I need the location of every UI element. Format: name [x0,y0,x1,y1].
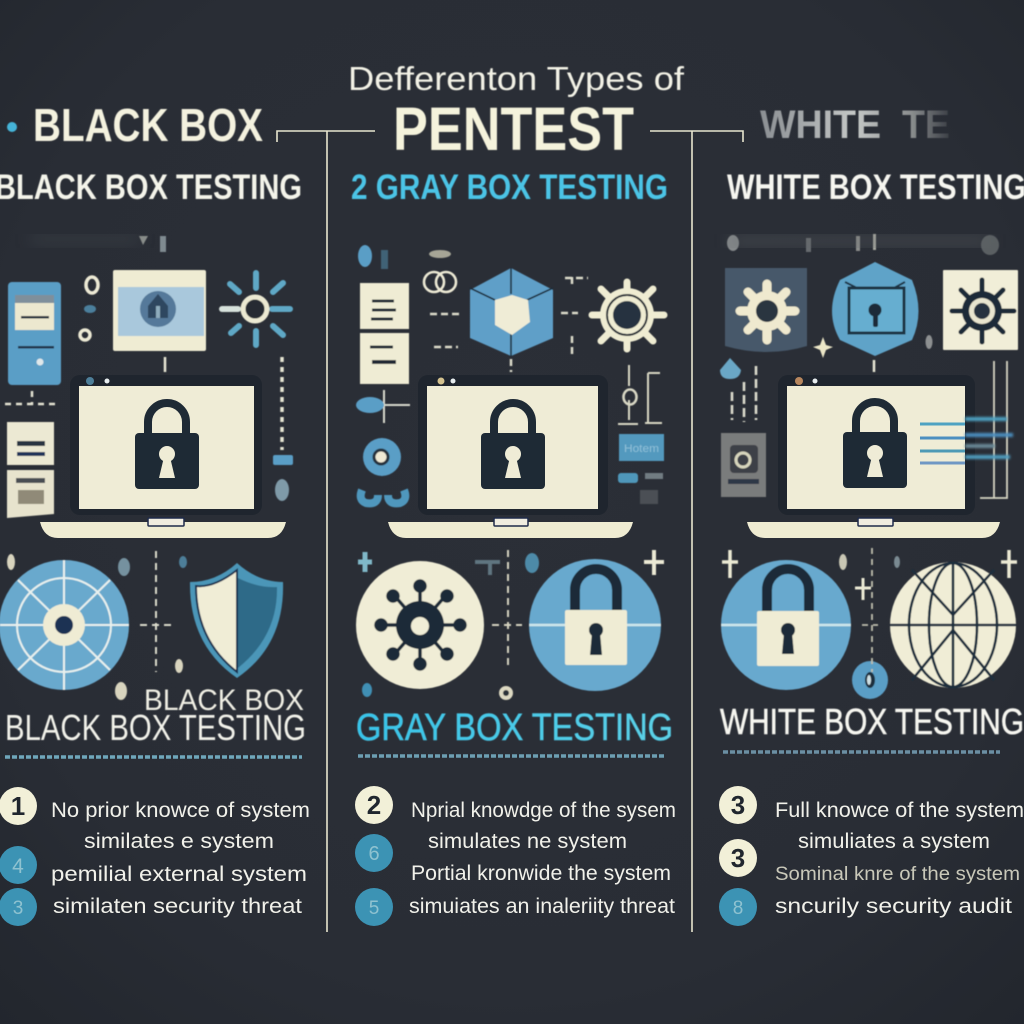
badge 3 [0,888,37,926]
icon: side frame [980,361,1007,498]
icon: blue label: Hotem [624,443,659,455]
title: Defferenton Types of: Defferenton Types of [348,60,685,97]
icon: drop mark [926,335,932,349]
icon: blue lock shield [832,262,918,356]
faded top marks [139,234,999,255]
icon: sun gear [222,273,290,345]
icon: padlock [843,402,907,488]
badge 3 second [719,839,757,877]
list text: No prior knowce of system [51,799,310,822]
icon: sparkle [813,337,833,358]
icon: hexagon [470,268,553,356]
dashed separators [5,752,1000,757]
laptop base [40,522,286,538]
panel: black box icons [5,270,293,518]
list text: sncurily security audit [775,895,1012,918]
bullet dot [7,122,17,132]
laptop base [388,522,633,538]
icon: laptop white box [747,375,1013,538]
icon: laptop gray box [388,375,633,538]
heading: Black Box Testing: BLACK BOX TESTING [0,168,302,207]
dotted line and tab [273,357,293,501]
icon: shield [190,563,283,678]
dashed connector left [5,391,60,405]
heading: Gray Box Testing: 2 GRAY BOX TESTING [351,168,668,207]
icon: linked rings [424,272,456,292]
icon: gear in slate shield [725,268,807,352]
icon: cream gear [592,282,664,349]
icon: lock circle [721,560,851,690]
icon: blue disc and rings [361,438,405,503]
icon: top drops [358,245,451,269]
icon: padlock [481,403,545,489]
badge 3: 3 [13,898,23,919]
icon: virus circle [356,561,484,689]
icon: gray camera card [721,433,766,497]
column headings [0,168,1024,207]
badge 8: 8 [733,898,743,919]
dashed lines [732,366,756,422]
center connector [873,360,875,372]
icon: water drop [720,358,741,379]
blurred placeholder strips [30,236,990,246]
list text: Portial kronwide the system [411,862,671,885]
badge 2 [355,786,393,824]
panel: gray box icons [356,245,664,504]
badge 3 second: 3 [731,843,745,873]
dashed connector [164,357,166,372]
icon: padlock [135,403,199,489]
dashed center cross [140,551,174,672]
list text: simulates ne system [428,830,627,853]
data stripes outside screen [965,419,1013,457]
list text: Nprial knowdge of the sysem [411,799,676,822]
icon: small rings [80,277,98,340]
heading: faded White Te: WHITE TE [760,103,950,147]
list text: simuliates a system [798,830,990,853]
heading: Black Box: BLACK BOX [33,99,263,151]
list text: similates e system [84,830,274,853]
laptop base [747,522,1000,538]
icon: dark gear on cream [943,270,1018,350]
dashed center line [492,550,522,670]
sparkles and dashes [722,548,1017,672]
lower icons gray box [356,550,664,700]
icon: blue drop [852,661,888,699]
badge 2 [0,846,37,884]
icon: blue blob [356,397,384,413]
icon: lock circle [529,559,661,691]
label: Black Box Testing: BLACK BOX TESTING [5,707,306,748]
list text: similaten security threat [53,895,302,918]
icon: globe [890,562,1016,688]
badge 2: 2 [367,790,381,820]
list: black box points [0,787,310,926]
icon: window with shield [113,270,206,351]
icon: target circle [0,560,129,690]
list text [775,799,1024,918]
list: gray box points [355,786,676,926]
list text: simuiates an inaleriity threat [409,895,675,918]
label: Black Box: BLACK BOX [144,684,304,717]
list: white box points [719,786,1024,926]
badge 1: 1 [11,791,25,821]
list text: Full knowce of the system [775,799,1024,822]
connector marks [430,277,588,372]
list text [51,799,310,918]
small decorative marks [7,554,187,700]
badge 6 [355,834,393,872]
badge 5 [355,888,393,926]
list text: pemilial external system [51,863,307,886]
lower icons black box [0,551,283,700]
bottom titles [5,684,1024,749]
data stripes inside screen [920,424,965,463]
badge 8 [719,888,757,926]
badge 5: 5 [369,898,379,919]
badge 1 [0,787,37,825]
icon: text cards [7,422,54,518]
badge 2: 4 [12,855,24,878]
badge 6: 6 [368,843,380,865]
badge 3: 3 [731,790,745,820]
icon: blue document [8,282,61,385]
connector lines and column dividers [277,131,743,932]
panel: white box icons [720,262,1018,498]
icon: text documents [360,283,409,384]
list text [409,799,676,918]
icon: side gauge [618,365,662,424]
title block [7,60,950,163]
small decorative marks [358,550,664,700]
icon: blue label [618,434,664,504]
label: Gray Box Testing: GRAY BOX TESTING [356,707,673,749]
title: PENTEST: PENTEST [393,95,634,163]
icon: laptop black box [40,375,286,538]
lower icons white box [721,548,1017,699]
badge 3 [719,786,757,824]
list text: Sominal knre of the system [775,864,1020,885]
icon: left cross [357,390,410,423]
